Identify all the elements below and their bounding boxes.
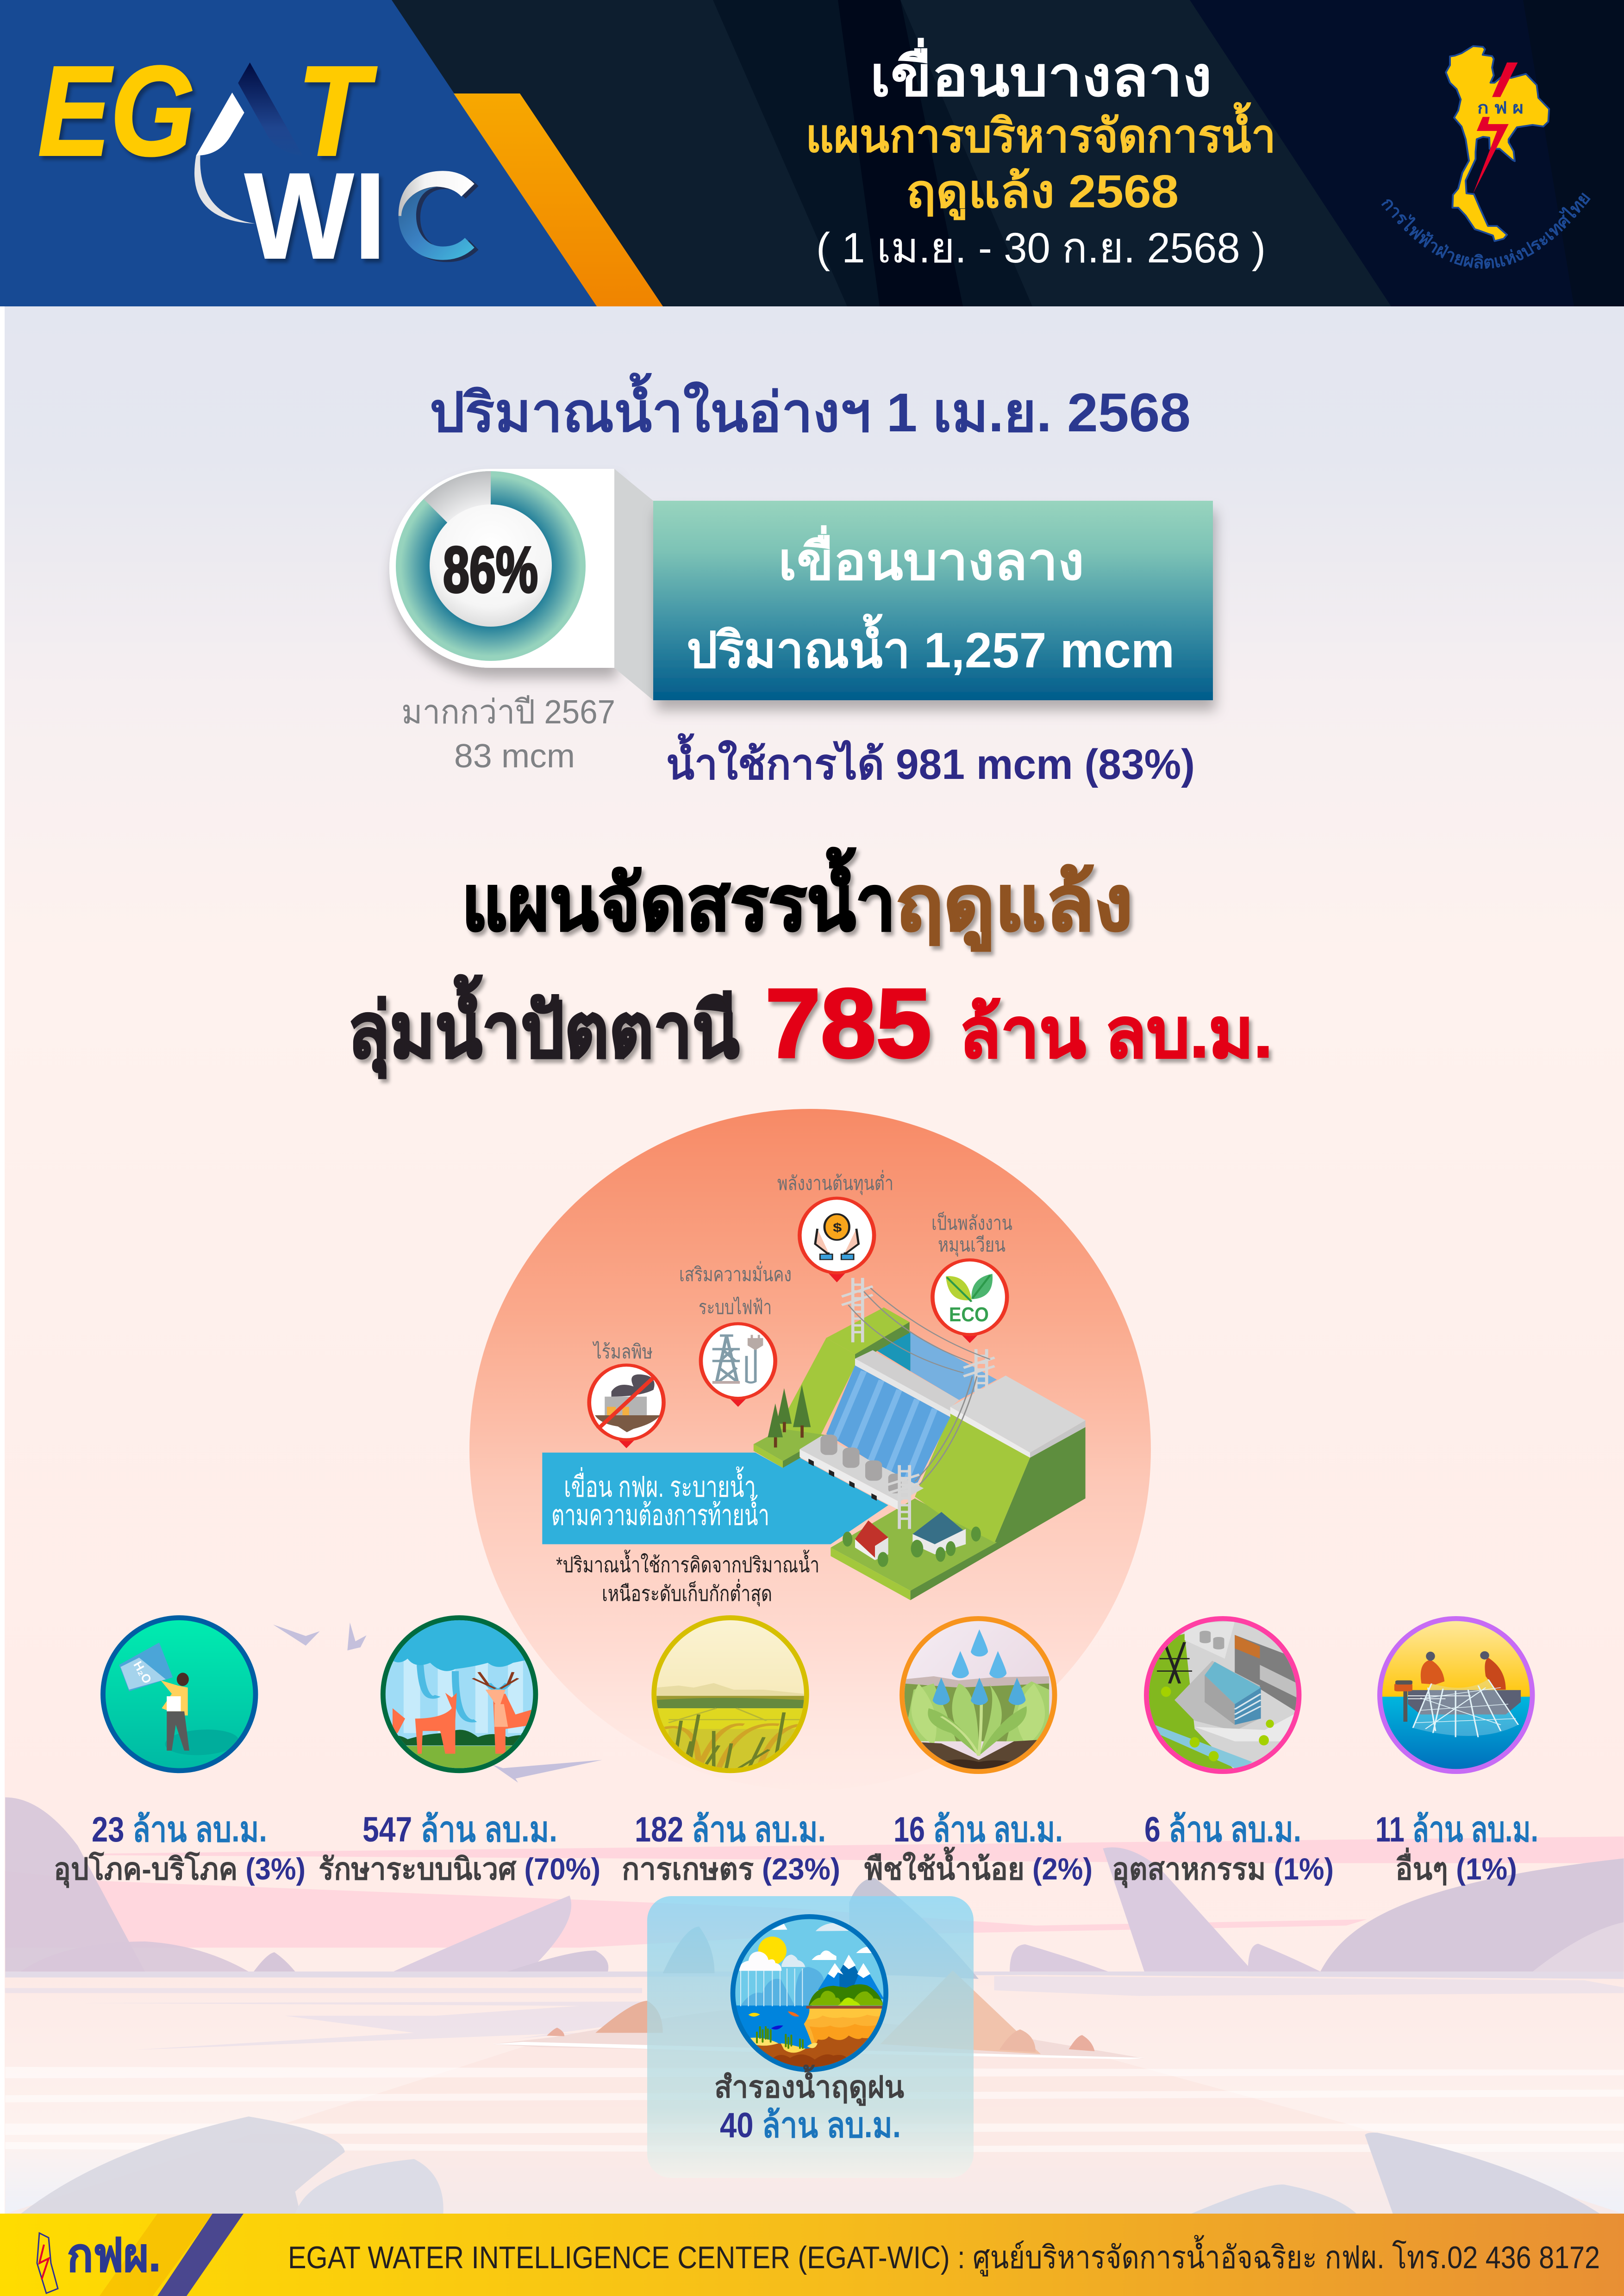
gauge 86% tab (389, 469, 653, 700)
heading: dry season allocation plan: ล้าน ลบ.ม. (959, 994, 1273, 1072)
category values and labels: การเกษตร (23%) (622, 1852, 840, 1886)
reserve label: สำรองน้ำฤดูฝน (714, 2064, 904, 2106)
reservoir status: gauge and volume box (389, 469, 1213, 788)
icon pin: renewable energy ECO: ECO (949, 1303, 989, 1325)
reserve value: 40 ล้าน ลบ.ม. (720, 2106, 901, 2145)
water release caption: เขื่อน กฟผ. ระบายน้ำ (564, 1466, 756, 1503)
background landscape (5, 1798, 1624, 2214)
category: ecosystem (381, 1615, 538, 1773)
category: agriculture (651, 1615, 809, 1773)
dam benefit labels: เสริมความมั่นคง (679, 1261, 792, 1285)
footer diagonal stripe (157, 2214, 244, 2296)
heading: dry season allocation plan: ฤดูแล้ง (896, 861, 1133, 951)
water-use categories (54, 1615, 1538, 1888)
value: consumption: 23 ล้าน ลบ.ม. (92, 1810, 267, 1849)
houses (843, 1512, 981, 1567)
header banner (0, 0, 1624, 306)
icon pin: power system security (701, 1324, 775, 1407)
dam benefit labels: หมุนเวียน (938, 1234, 1006, 1257)
EGAT seal: Thailand map with lightning (1377, 46, 1594, 273)
dam illustration text (551, 1170, 1012, 1607)
dam benefit labels: พลังงานต้นทุนต่ำ (777, 1170, 893, 1195)
reserve illustration (731, 1914, 888, 2073)
footnote: *ปริมาณน้ำใช้การคิดจากปริมาณน้ำ (556, 1549, 819, 1577)
dam benefit labels: เป็นพลังงาน (931, 1212, 1012, 1234)
footer bar (0, 2214, 1624, 2296)
footer logo (37, 2229, 161, 2293)
more than last year note: 83 mcm (454, 738, 575, 775)
icon pin: low cost energy (800, 1198, 874, 1282)
value: agriculture: 182 ล้าน ลบ.ม. (635, 1810, 826, 1849)
gauge 86% tab: 86% (443, 533, 538, 606)
category values and labels (54, 1810, 1538, 1888)
icon pin: renewable energy ECO (932, 1260, 1007, 1343)
more than last year note (401, 694, 615, 775)
category values and labels: อุตสาหกรรม (1%) (1112, 1852, 1334, 1888)
icon pin: no pollution (589, 1365, 664, 1448)
transmission towers (842, 1278, 994, 1529)
footnote (556, 1549, 819, 1607)
dam illustration (542, 1198, 1086, 1600)
logo: EGAT WIC (38, 40, 479, 285)
header title text: ( 1 เม.ย. - 30 ก.ย. 2568 ) (816, 224, 1266, 272)
EGAT seal: Thailand map with lightning: การไฟฟ้าฝ่ายผลิตแห่งประเทศไทย (1377, 188, 1594, 273)
volume box: ปริมาณน้ำ 1,257 mcm (687, 613, 1174, 678)
category values and labels: อื่นๆ (1%) (1395, 1847, 1517, 1886)
category: others (fishing) (1377, 1616, 1536, 1774)
volume box: เขื่อนบางลาง (778, 525, 1084, 591)
EGAT seal: Thailand map with lightning: ก ฟ ผ (1477, 98, 1524, 117)
category values and labels: อุปโภค-บริโภค (3%) (54, 1851, 306, 1888)
category: consumption: H₂O (131, 1659, 155, 1686)
category: consumption (100, 1615, 258, 1773)
logo: EGAT WIC: T (297, 40, 377, 182)
header title text: ฤดูแล้ง 2568 (906, 166, 1179, 220)
heading: dry season allocation plan: ลุ่มน้ำปัตตานี (348, 975, 739, 1078)
footer logo: กฟผ. (67, 2229, 161, 2281)
logo: EGAT WIC: EG (38, 40, 195, 182)
water release caption (551, 1466, 769, 1531)
usable water text: น้ำใช้การได้ 981 mcm (83%) (666, 733, 1195, 788)
category: low-water crops (899, 1616, 1057, 1774)
volume box (653, 501, 1213, 700)
logo: EGAT WIC: WI (244, 148, 386, 285)
dam benefit labels (592, 1170, 1012, 1363)
large salmon circle backdrop (469, 1109, 1151, 1790)
birds (273, 1623, 602, 1783)
heading: reservoir volume: ปริมาณน้ำในอ่างฯ 1 เม.ย. 2568 (430, 373, 1191, 443)
dam body (754, 1307, 1086, 1600)
footnote: เหนือระดับเก็บกักต่ำสุด (602, 1579, 772, 1607)
category values and labels: พืชใช้น้ำน้อย (2%) (864, 1846, 1093, 1886)
icon pin: low cost energy: $ (833, 1220, 842, 1234)
value: industry: 6 ล้าน ลบ.ม. (1144, 1810, 1301, 1849)
rainy-season reserve panel (647, 1896, 974, 2178)
dam benefit labels: ระบบไฟฟ้า (699, 1296, 772, 1318)
category: industry (1144, 1616, 1301, 1774)
heading: dry season allocation plan: แผนจัดสรรน้ำ (462, 847, 896, 946)
water release caption: ตามความต้องการท้ายน้ำ (551, 1494, 769, 1531)
header title text: เขื่อนบางลาง (870, 37, 1212, 108)
value: ecosystem: 547 ล้าน ลบ.ม. (362, 1810, 557, 1849)
header title text (806, 37, 1276, 272)
category values and labels: รักษาระบบนิเวศ (70%) (319, 1852, 600, 1886)
dam benefit labels: ไร้มลพิษ (592, 1341, 653, 1363)
heading: dry season allocation plan: 785 (765, 968, 931, 1078)
water release band (542, 1453, 888, 1544)
heading: dry season allocation plan (348, 847, 1273, 1078)
more than last year note: มากกว่าปี 2567 (401, 694, 615, 731)
header title text: แผนการบริหารจัดการน้ำ (806, 102, 1276, 162)
value: low-water crops: 16 ล้าน ลบ.ม. (893, 1810, 1063, 1849)
orange diagonal stripe (454, 93, 663, 306)
value: others: 11 ล้าน ลบ.ม. (1375, 1810, 1538, 1849)
pine trees (768, 1385, 811, 1448)
